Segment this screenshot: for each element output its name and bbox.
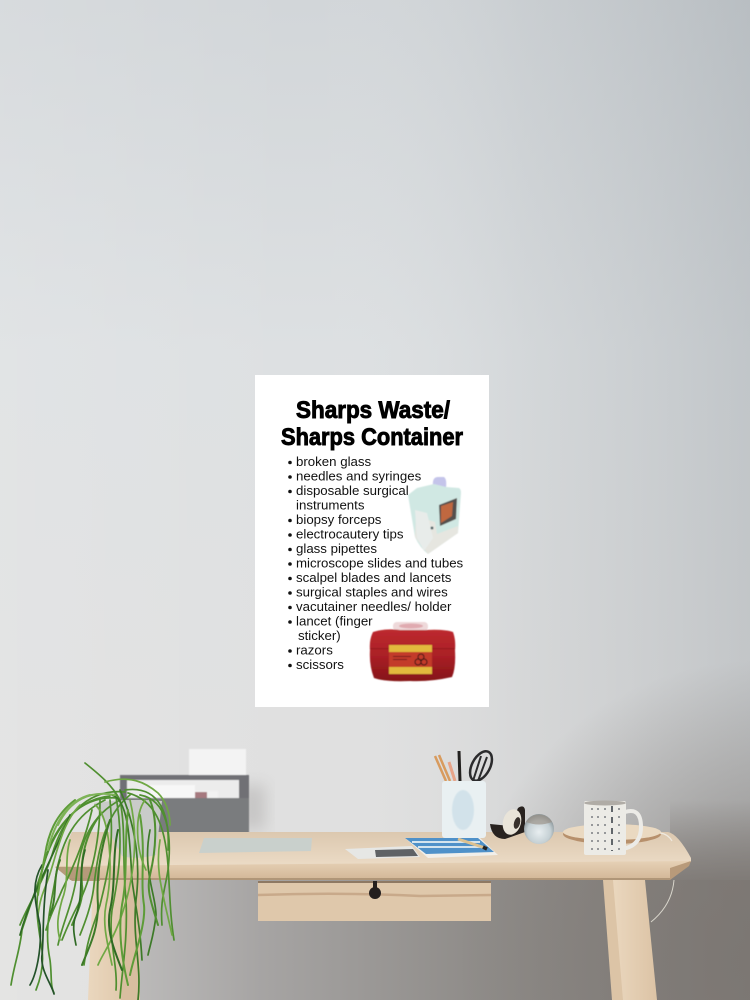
stone-pattern booklet	[199, 838, 312, 853]
plant pot	[94, 800, 162, 858]
bulleted list of sharps: broken glass	[296, 454, 372, 469]
glass paperweight	[524, 814, 554, 844]
bulleted list of sharps: razors	[296, 642, 333, 658]
bulleted list of sharps: scalpel blades and lancets	[296, 570, 452, 585]
bulleted list of sharps: scissors	[296, 657, 344, 672]
poster	[255, 375, 489, 707]
blue striped notebook and papers	[345, 838, 498, 859]
bulleted list of sharps: instruments	[296, 498, 365, 512]
organiser tray with papers	[120, 749, 249, 839]
desk legs	[88, 880, 657, 1000]
bulleted list of sharps	[288, 454, 464, 672]
bulleted list of sharps: biopsy forceps	[296, 512, 382, 527]
icon: red sharps container with biohazard label	[370, 622, 455, 681]
patterned coffee mug	[584, 800, 641, 855]
poster title: Sharps Waste/	[296, 397, 450, 424]
bulleted list of sharps: microscope slides and tubes	[296, 556, 464, 570]
bulleted list of sharps: lancet (finger	[296, 614, 373, 628]
pen pot with pencils and scissors	[435, 748, 496, 838]
wooden coaster tray	[563, 824, 674, 922]
bulleted list of sharps: disposable surgical	[296, 483, 409, 498]
bulleted list of sharps: surgical staples and wires	[296, 584, 448, 600]
tape dispenser	[490, 806, 525, 839]
desk drawer	[258, 881, 491, 921]
bulleted list of sharps: sticker)	[298, 628, 341, 643]
bulleted list of sharps: vacutainer needles/ holder	[296, 599, 452, 614]
bulleted list of sharps: glass pipettes	[296, 541, 377, 556]
bulleted list of sharps: needles and syringes	[296, 468, 422, 484]
bulleted list of sharps: electrocautery tips	[296, 526, 404, 542]
trailing green plant	[11, 763, 174, 1000]
desk	[55, 832, 691, 921]
poster title: Sharps Container	[281, 424, 463, 451]
icon: white wall-mounted sharps container	[408, 477, 461, 554]
poster title	[281, 397, 463, 451]
